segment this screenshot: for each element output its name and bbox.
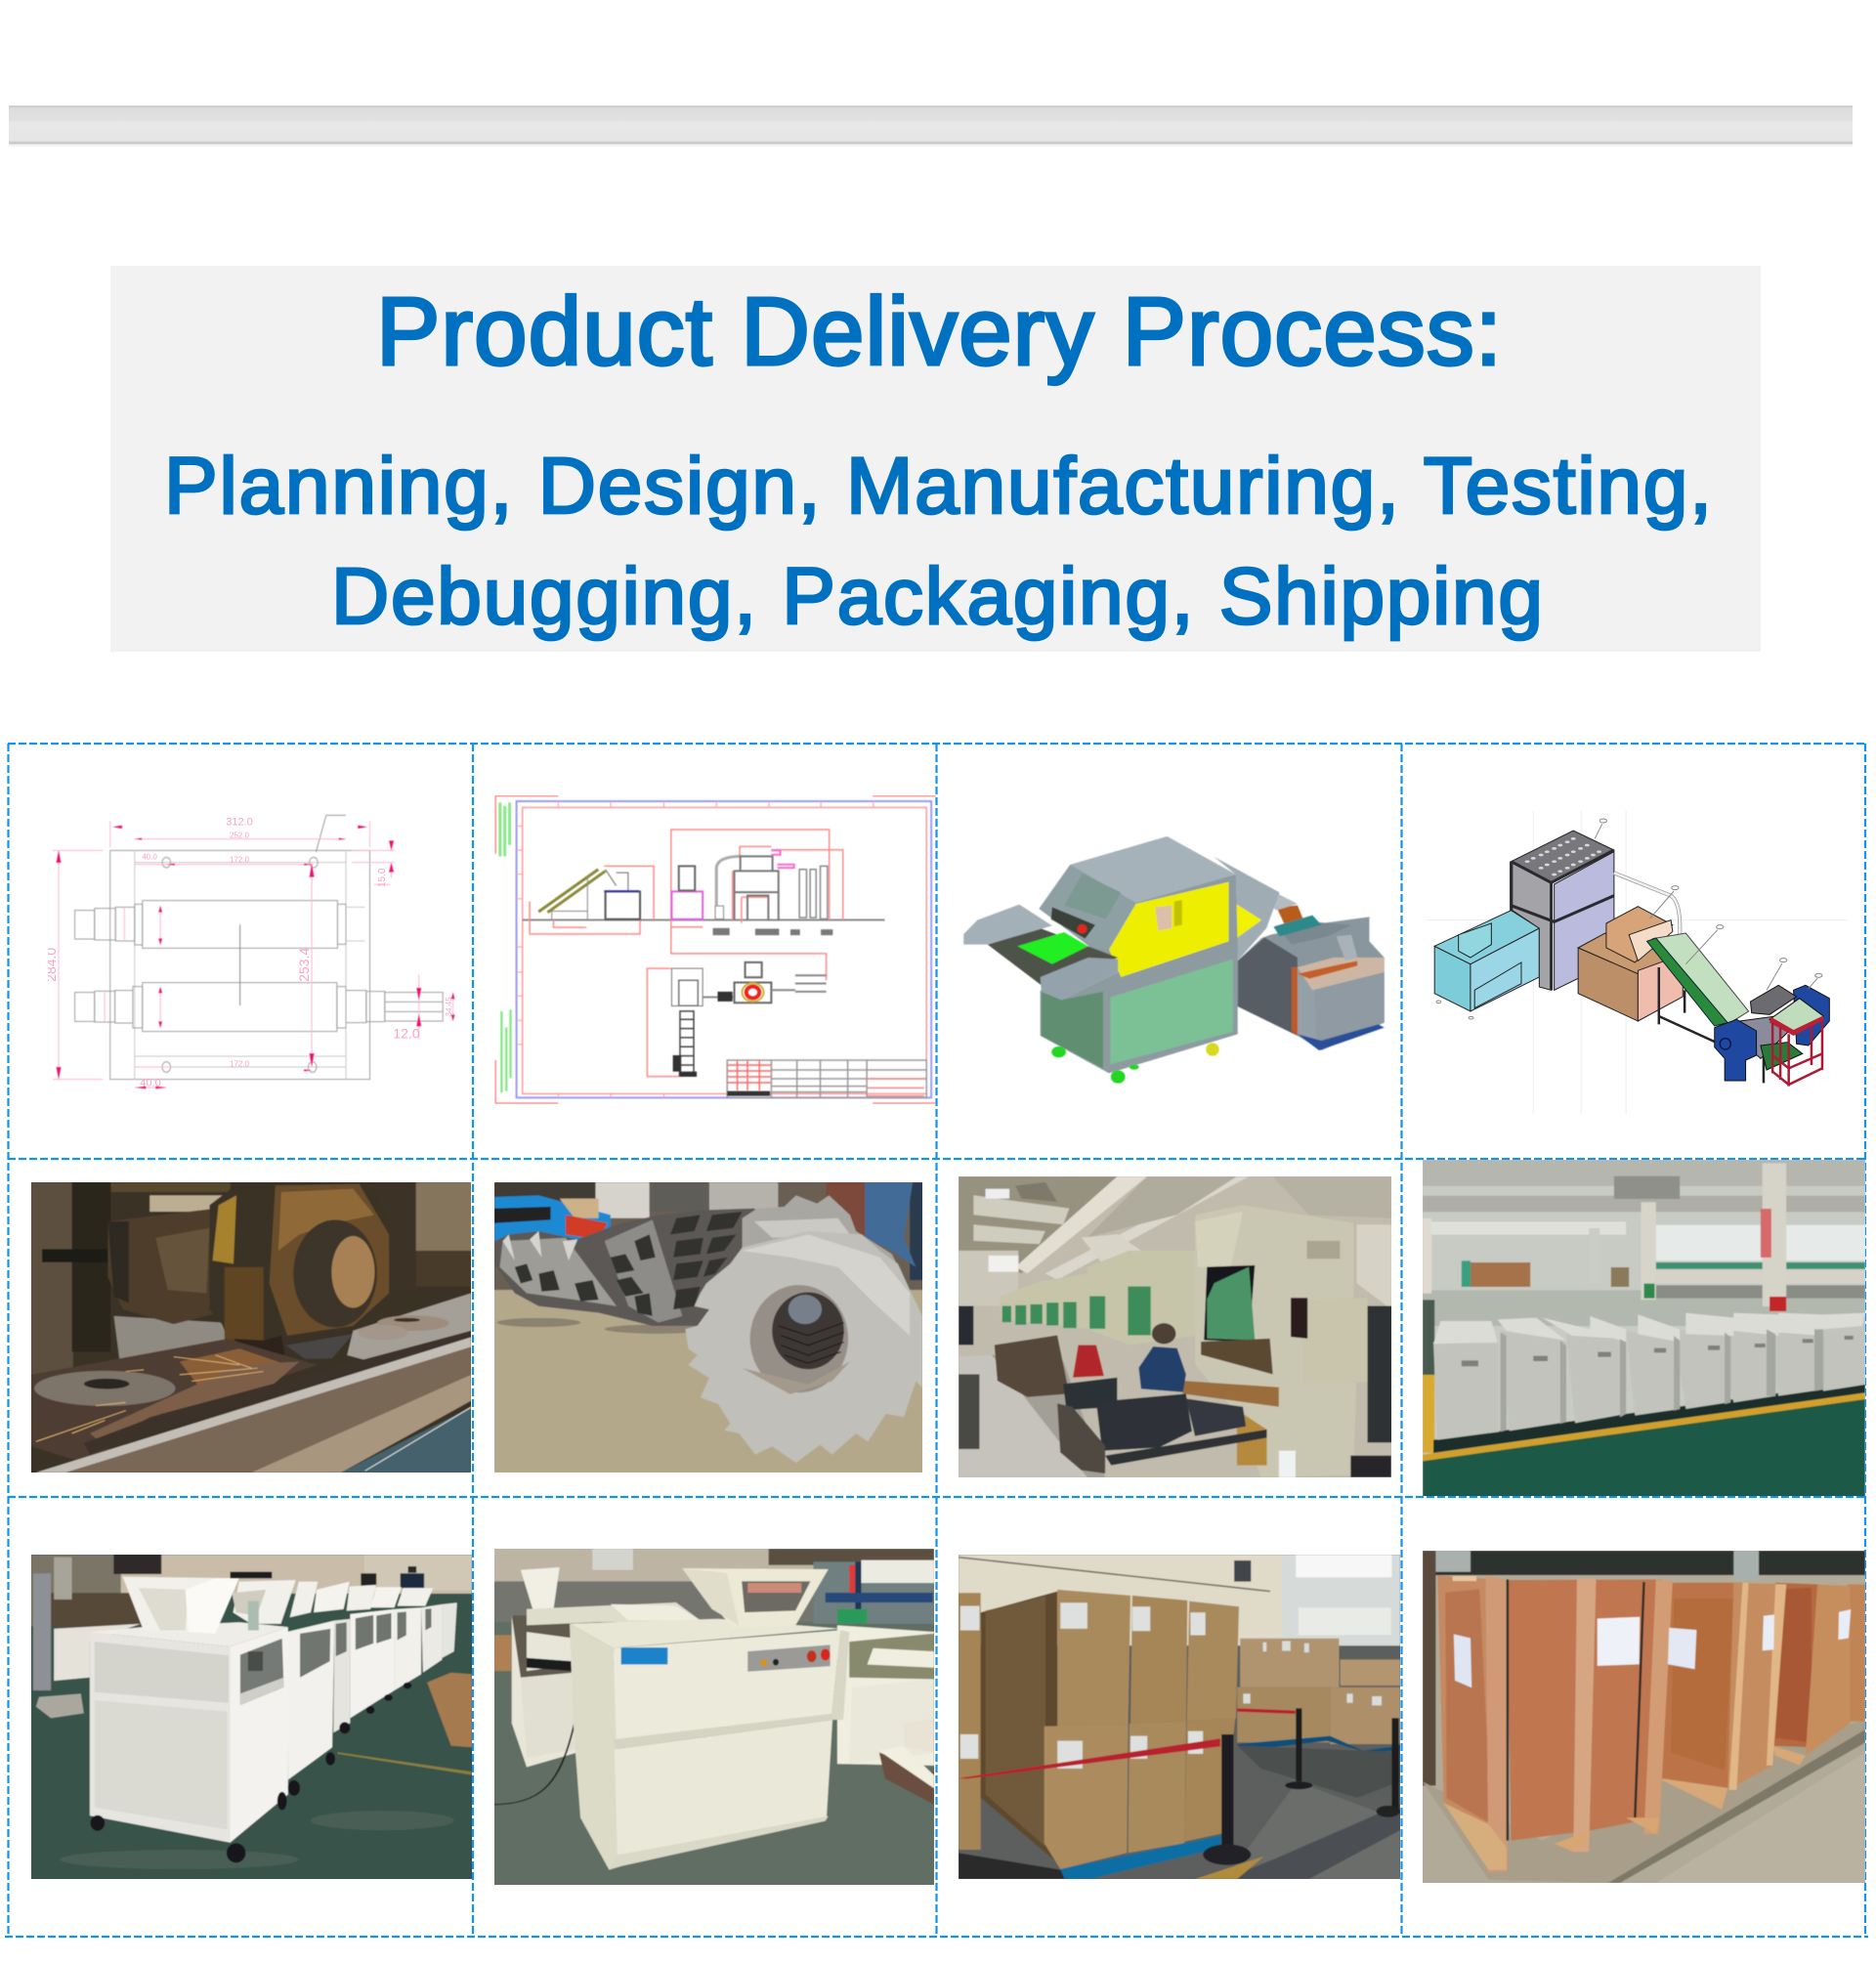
dimension labels bbox=[43, 816, 453, 1089]
3D model: production line with blue tower bbox=[1426, 811, 1847, 1114]
dimension labels: 312.0 bbox=[226, 816, 253, 828]
photo: cream shredder with YUEDU label bbox=[494, 1549, 934, 1885]
hood bbox=[1070, 836, 1235, 903]
photo: row of white shredders bbox=[31, 1555, 472, 1879]
green floor bbox=[1423, 1396, 1865, 1499]
dimension labels: 252.0 bbox=[230, 831, 250, 839]
workers bbox=[1073, 1345, 1104, 1378]
tan unit bbox=[1578, 907, 1683, 1021]
cabinets bbox=[1433, 1319, 1865, 1440]
photo: grinding saw blade with sparks bbox=[31, 1182, 471, 1473]
dimension labels: 172.0 bbox=[230, 1059, 250, 1068]
front crate bbox=[1437, 1575, 1504, 1870]
hoppers bbox=[123, 1577, 239, 1634]
subtitle line 1: Planning, Design, Manufacturing, Testing, bbox=[164, 442, 1712, 531]
middle crate bbox=[1662, 1583, 1743, 1788]
tray bbox=[987, 928, 1118, 985]
press line bbox=[1001, 1251, 1201, 1345]
paper labels bbox=[1454, 1635, 1471, 1687]
yellow front bbox=[1109, 882, 1228, 977]
right machine bbox=[1237, 917, 1384, 1050]
dimension labels: 40.0 bbox=[142, 852, 157, 861]
cabinets far to near bbox=[442, 1602, 457, 1658]
hopper bbox=[682, 1568, 829, 1628]
casters bbox=[90, 1683, 411, 1862]
right machines bbox=[1715, 985, 1829, 1081]
rear machine right bbox=[837, 1625, 934, 1766]
pipe bbox=[1614, 873, 1680, 935]
wheels bbox=[1051, 1046, 1065, 1057]
dimension labels: 40.0 bbox=[140, 1077, 161, 1089]
plate stacks bbox=[1063, 1378, 1117, 1410]
dimension labels: 253.4 bbox=[296, 947, 312, 981]
photo: stacked cardboard cartons on blue pallets bbox=[959, 1555, 1400, 1879]
ribbon bbox=[959, 1738, 1220, 1779]
photo: punch press workshop bbox=[959, 1176, 1391, 1477]
dimension labels: 12.0 bbox=[393, 1025, 420, 1041]
cable bbox=[494, 1724, 575, 1805]
conveyor bbox=[1653, 933, 1749, 1024]
hood back wedge bbox=[1214, 857, 1279, 961]
dashed grid bbox=[5, 743, 1868, 1939]
CAD drawing: production line layout bbox=[494, 795, 936, 1104]
photo: wooden shipping crates bbox=[1423, 1551, 1865, 1883]
title: Product Delivery Process: bbox=[376, 278, 1502, 385]
green cabinet bbox=[1041, 990, 1102, 1068]
photo: shredder cutter rollers bbox=[494, 1182, 922, 1473]
dimension labels: 172.0 bbox=[230, 855, 250, 864]
photo: finished machine cabinets in factory hall bbox=[1423, 1160, 1865, 1496]
CAD drawing: shredder roller shafts bbox=[48, 814, 455, 1090]
rear machine left bbox=[512, 1615, 577, 1768]
subtitle line 2: Debugging, Packaging, Shipping bbox=[331, 552, 1543, 641]
main cabinet bbox=[90, 1632, 231, 1843]
dimension labels: 34.45 bbox=[445, 996, 453, 1016]
dimension labels: 15.0 bbox=[377, 868, 388, 887]
floor bbox=[1423, 1720, 1865, 1883]
tower bbox=[1513, 862, 1552, 990]
3D model: shredder with yellow panels bbox=[963, 836, 1386, 1084]
carton stack bbox=[959, 1593, 981, 1850]
body silhouette bbox=[1039, 836, 1237, 1073]
stanchions bbox=[1221, 1734, 1234, 1845]
light blue unit bbox=[1434, 946, 1471, 1011]
far crates bbox=[1848, 1584, 1865, 1722]
heading panel bbox=[110, 266, 1761, 652]
annotation leaders bbox=[1436, 819, 1822, 1019]
top grey bar bbox=[9, 106, 1853, 147]
main cabinet bbox=[570, 1624, 622, 1870]
